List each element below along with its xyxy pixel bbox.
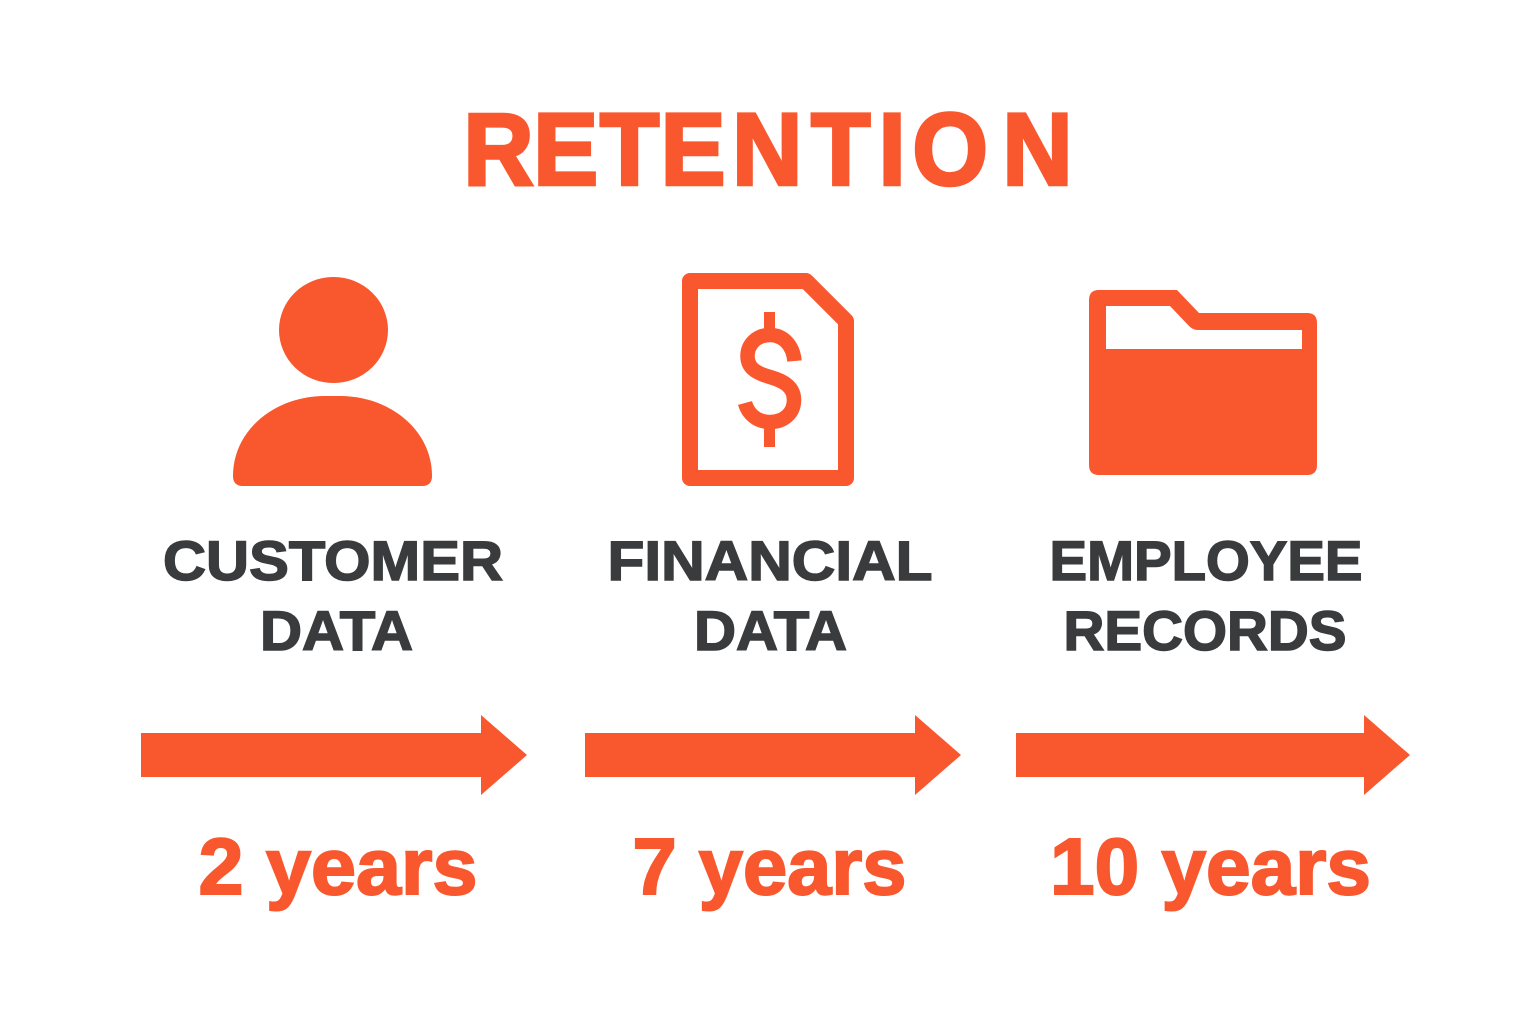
- heading: financial data: DATA: [694, 599, 847, 662]
- title: RETENTION: [464, 93, 1072, 207]
- heading: employee records: RECORDS: [1064, 599, 1346, 662]
- duration: 7 years: 7 years: [632, 822, 906, 911]
- heading: financial data: FINANCIAL: [608, 529, 932, 592]
- duration: 10 years: 10 years: [1050, 822, 1371, 911]
- heading: customer data: DATA: [260, 599, 413, 662]
- panel: financial data: [585, 281, 961, 911]
- heading: financial data: [608, 529, 932, 662]
- panel: customer data: [141, 277, 527, 911]
- icon: folder: [1089, 290, 1317, 475]
- icon: financial document: [690, 281, 846, 478]
- duration: 2 years: 2 years: [198, 822, 477, 911]
- heading: customer data: [163, 529, 503, 662]
- heading: employee records: EMPLOYEE: [1050, 529, 1362, 592]
- icon: person: [233, 277, 432, 486]
- arrow: financial data: [585, 715, 961, 795]
- arrow: employee records: [1016, 715, 1410, 795]
- heading: employee records: [1050, 529, 1362, 662]
- arrow: customer data: [141, 715, 527, 795]
- heading: customer data: CUSTOMER: [163, 529, 503, 592]
- panel: employee records: [1016, 290, 1410, 911]
